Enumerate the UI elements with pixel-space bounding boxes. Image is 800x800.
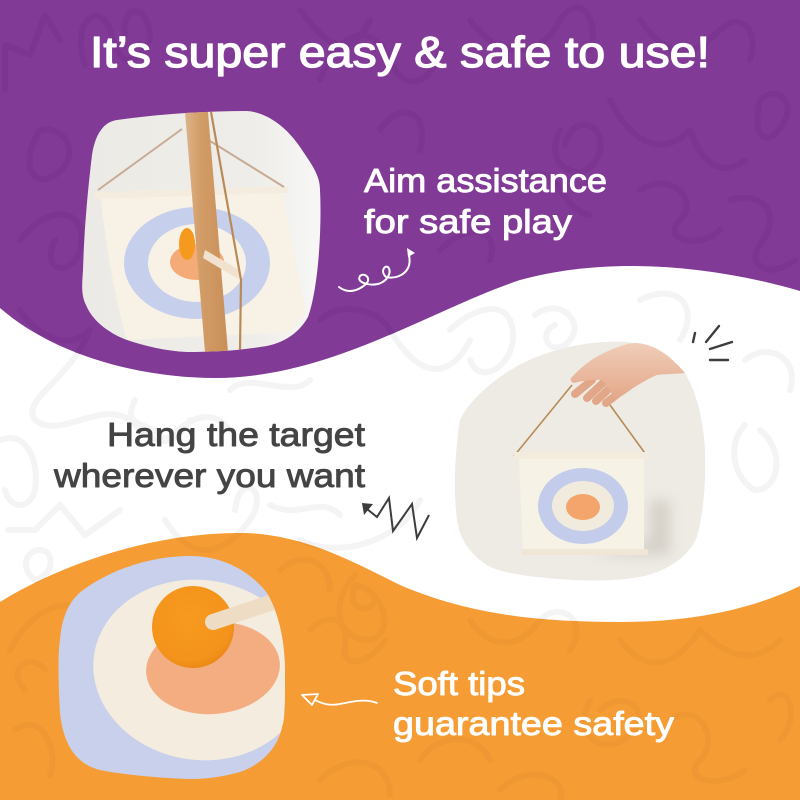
cream ring <box>552 481 614 531</box>
caption: aim assistance: for safe play <box>364 203 573 240</box>
shadow <box>612 497 674 559</box>
purple top wave <box>0 0 800 378</box>
banner cords <box>98 129 284 190</box>
felt ball <box>152 586 234 668</box>
banner top rod <box>166 186 288 193</box>
peach bullseye <box>146 623 280 714</box>
banner cloth <box>519 455 644 553</box>
wooden stick <box>213 602 273 622</box>
hanging cords <box>514 385 647 456</box>
cream target ring <box>148 224 246 302</box>
photo: hand holding target <box>455 342 705 581</box>
arrow: zigzag <box>362 498 429 538</box>
fingers <box>575 380 620 403</box>
orange bullseye <box>566 494 600 520</box>
photo: soft felt tip close-up <box>58 556 285 779</box>
caption: aim assistance <box>364 162 607 240</box>
spark lines <box>693 326 732 360</box>
arrow: wavy white <box>302 694 377 705</box>
blue target ring <box>124 207 270 319</box>
caption: hang the target <box>53 416 365 494</box>
peach bullseye <box>170 244 224 280</box>
backdrop blob <box>455 342 705 581</box>
title: It’s super easy & safe to use! <box>90 28 710 77</box>
hand <box>571 343 685 403</box>
wooden pole <box>185 112 228 352</box>
felt tip <box>179 228 195 260</box>
cord <box>211 112 241 350</box>
caption: hang the target: wherever you want <box>53 457 365 494</box>
caption: hang the target: Hang the target <box>107 416 365 453</box>
bottom rod <box>522 549 648 555</box>
blue ring <box>538 468 628 544</box>
caption: soft tips: guarantee safety <box>393 705 675 742</box>
arrow: curly white <box>339 248 415 291</box>
orange bottom wave <box>0 533 800 800</box>
back of hand <box>571 343 685 399</box>
arrow stick <box>203 250 241 279</box>
top rod <box>514 452 648 459</box>
photo: aim assistance target with pole <box>82 111 320 352</box>
cream ring <box>93 580 285 760</box>
caption: aim assistance: Aim assistance <box>364 162 607 199</box>
banner cloth <box>100 188 306 340</box>
caption: soft tips <box>393 665 675 742</box>
caption: soft tips: Soft tips <box>393 665 525 702</box>
